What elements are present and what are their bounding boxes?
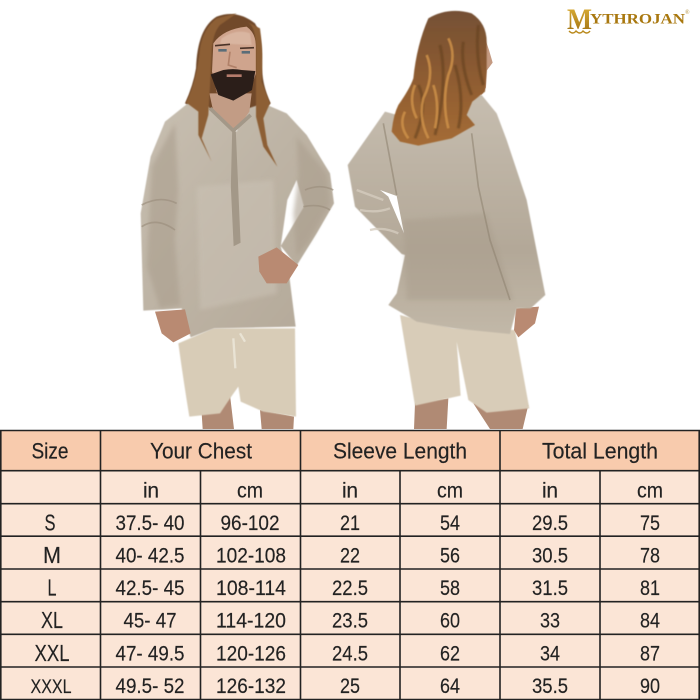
arm gap xyxy=(380,190,404,233)
row L: 108-114 xyxy=(216,577,286,600)
dark curls xyxy=(415,25,483,138)
size table xyxy=(0,430,700,700)
row XXXL: 35.5 xyxy=(532,675,568,698)
unit row: cm xyxy=(437,480,463,502)
forehead highlight xyxy=(220,32,252,45)
row L: 42.5- 45 xyxy=(116,577,184,600)
nose shadow xyxy=(228,52,237,68)
sleeve seam xyxy=(383,123,510,300)
row L: L xyxy=(48,574,57,600)
row L xyxy=(48,574,660,600)
mouth xyxy=(227,72,242,80)
row S: 21 xyxy=(340,512,360,535)
row XL: 114-120 xyxy=(216,610,286,632)
neck xyxy=(209,93,252,131)
shorts xyxy=(400,315,529,413)
logo scroll flourish xyxy=(569,31,590,33)
row M: 56 xyxy=(440,544,460,568)
row L: 58 xyxy=(440,577,460,600)
shirt xyxy=(348,95,545,334)
header row: Total Length xyxy=(542,438,658,464)
row XL: 45- 47 xyxy=(124,610,176,632)
row S xyxy=(44,510,660,536)
row XXL: 47- 49.5 xyxy=(116,642,184,666)
hair xyxy=(392,11,487,146)
hand xyxy=(514,307,539,337)
logo initial M: M xyxy=(567,3,592,36)
hair mass xyxy=(392,11,487,146)
unit row: in xyxy=(342,480,358,502)
row XXL: XXL xyxy=(34,640,70,666)
row XXL xyxy=(34,640,660,666)
drawstring xyxy=(233,333,245,368)
header row: Size xyxy=(32,438,68,464)
row XXXL xyxy=(30,675,660,698)
unit row: in xyxy=(143,480,159,502)
row XXXL: 49.5- 52 xyxy=(116,675,184,698)
row M: M xyxy=(43,542,61,568)
row XXXL: 90 xyxy=(640,675,660,698)
row XL: 33 xyxy=(540,610,560,632)
row S: 29.5 xyxy=(532,512,568,535)
row XXXL: 25 xyxy=(340,675,360,698)
unit row: cm xyxy=(237,480,263,502)
row S: 96-102 xyxy=(220,512,280,535)
logo: Mythrojan xyxy=(567,3,690,36)
logo registered mark: ® xyxy=(685,9,690,16)
row XXL: 62 xyxy=(440,642,460,666)
header row: Sleeve Length xyxy=(333,438,467,464)
eyebrows xyxy=(215,44,254,48)
light curls xyxy=(402,38,452,138)
legs xyxy=(202,395,294,429)
row L: 31.5 xyxy=(532,577,568,600)
shorts xyxy=(178,328,296,417)
sleeve folds xyxy=(142,187,333,230)
header row xyxy=(32,438,658,464)
row XXXL: XXXL xyxy=(30,677,72,698)
row XXL: 87 xyxy=(640,642,660,666)
figure: front view of model xyxy=(141,13,334,429)
unit row: in xyxy=(542,480,558,502)
row XL: XL xyxy=(41,607,63,633)
right hand xyxy=(258,247,298,283)
sleeve folds xyxy=(357,190,398,233)
head xyxy=(211,27,256,101)
row M: 22 xyxy=(340,544,360,568)
unit row: cm xyxy=(637,480,663,502)
shirt shading xyxy=(403,213,513,300)
beard xyxy=(211,69,255,101)
table grid xyxy=(0,430,700,700)
row M: 40- 42.5 xyxy=(116,544,184,568)
row M xyxy=(43,542,660,568)
shirt xyxy=(141,102,334,337)
header row: Your Chest xyxy=(150,438,252,464)
back hair xyxy=(185,14,271,115)
row S: 75 xyxy=(640,512,660,535)
hair strands xyxy=(186,13,277,167)
collar and tie xyxy=(210,108,251,243)
legs xyxy=(414,398,528,429)
row XXL: 34 xyxy=(540,642,560,666)
unit row xyxy=(143,480,663,502)
row XL: 84 xyxy=(640,610,660,632)
row S: S xyxy=(44,510,56,536)
left hand xyxy=(155,309,191,342)
figure: back view of model xyxy=(348,11,545,429)
row L: 22.5 xyxy=(332,577,368,600)
row XXL: 120-126 xyxy=(216,642,286,666)
row M: 30.5 xyxy=(532,544,568,568)
row XL: 23.5 xyxy=(332,610,368,632)
logo wordmark: YTHROJAN xyxy=(590,12,685,28)
sleeve shading xyxy=(147,123,330,308)
row L: 81 xyxy=(640,577,660,600)
row XXL: 24.5 xyxy=(332,642,368,666)
eyes xyxy=(218,50,250,52)
row S: 37.5- 40 xyxy=(116,512,184,535)
table backgrounds xyxy=(0,430,700,700)
row XL: 60 xyxy=(440,610,460,632)
face sliver xyxy=(473,38,493,95)
row M: 78 xyxy=(640,544,660,568)
face xyxy=(212,27,256,100)
shirt highlight xyxy=(197,180,277,310)
row M: 102-108 xyxy=(216,544,286,568)
row S: 54 xyxy=(440,512,460,535)
row XXXL: 126-132 xyxy=(216,675,286,698)
row XXXL: 64 xyxy=(440,675,460,698)
row XL xyxy=(41,607,660,633)
